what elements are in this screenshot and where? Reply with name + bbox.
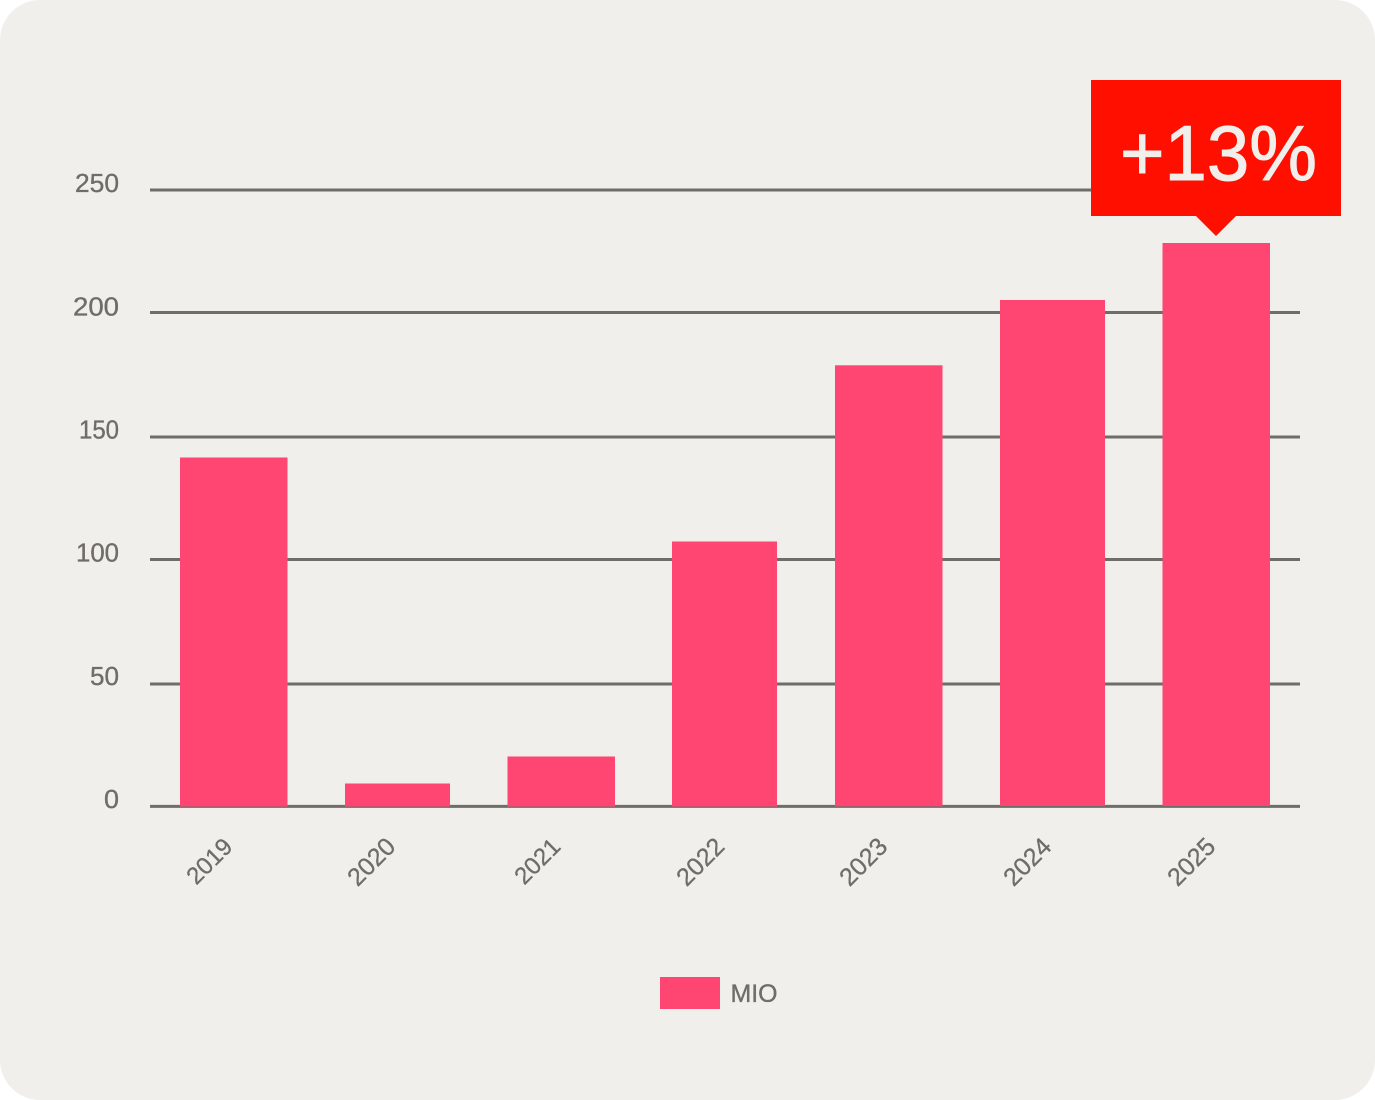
x axis labels: 2023 [834, 832, 893, 892]
x axis labels: 2019 [181, 833, 238, 890]
x axis labels: 2021 [509, 833, 566, 890]
x axis labels: 2020 [342, 832, 401, 892]
y axis labels: 250 [75, 168, 119, 198]
y axis labels: 50 [90, 661, 119, 691]
x axis labels: 2022 [671, 832, 730, 892]
y axis labels: 100 [76, 538, 119, 568]
y axis labels [73, 168, 119, 814]
legend [660, 977, 778, 1009]
callout: +13%: +13% [1120, 109, 1317, 197]
callout: +13% [1091, 80, 1341, 236]
y axis labels: 150 [79, 414, 119, 444]
x axis labels: 2025 [1162, 832, 1221, 892]
x axis labels: 2024 [998, 832, 1057, 892]
legend: MIO [730, 980, 778, 1008]
bars [180, 243, 1270, 806]
y axis labels: 200 [73, 292, 119, 322]
y axis labels: 0 [104, 784, 119, 814]
x axis labels [181, 832, 1221, 892]
